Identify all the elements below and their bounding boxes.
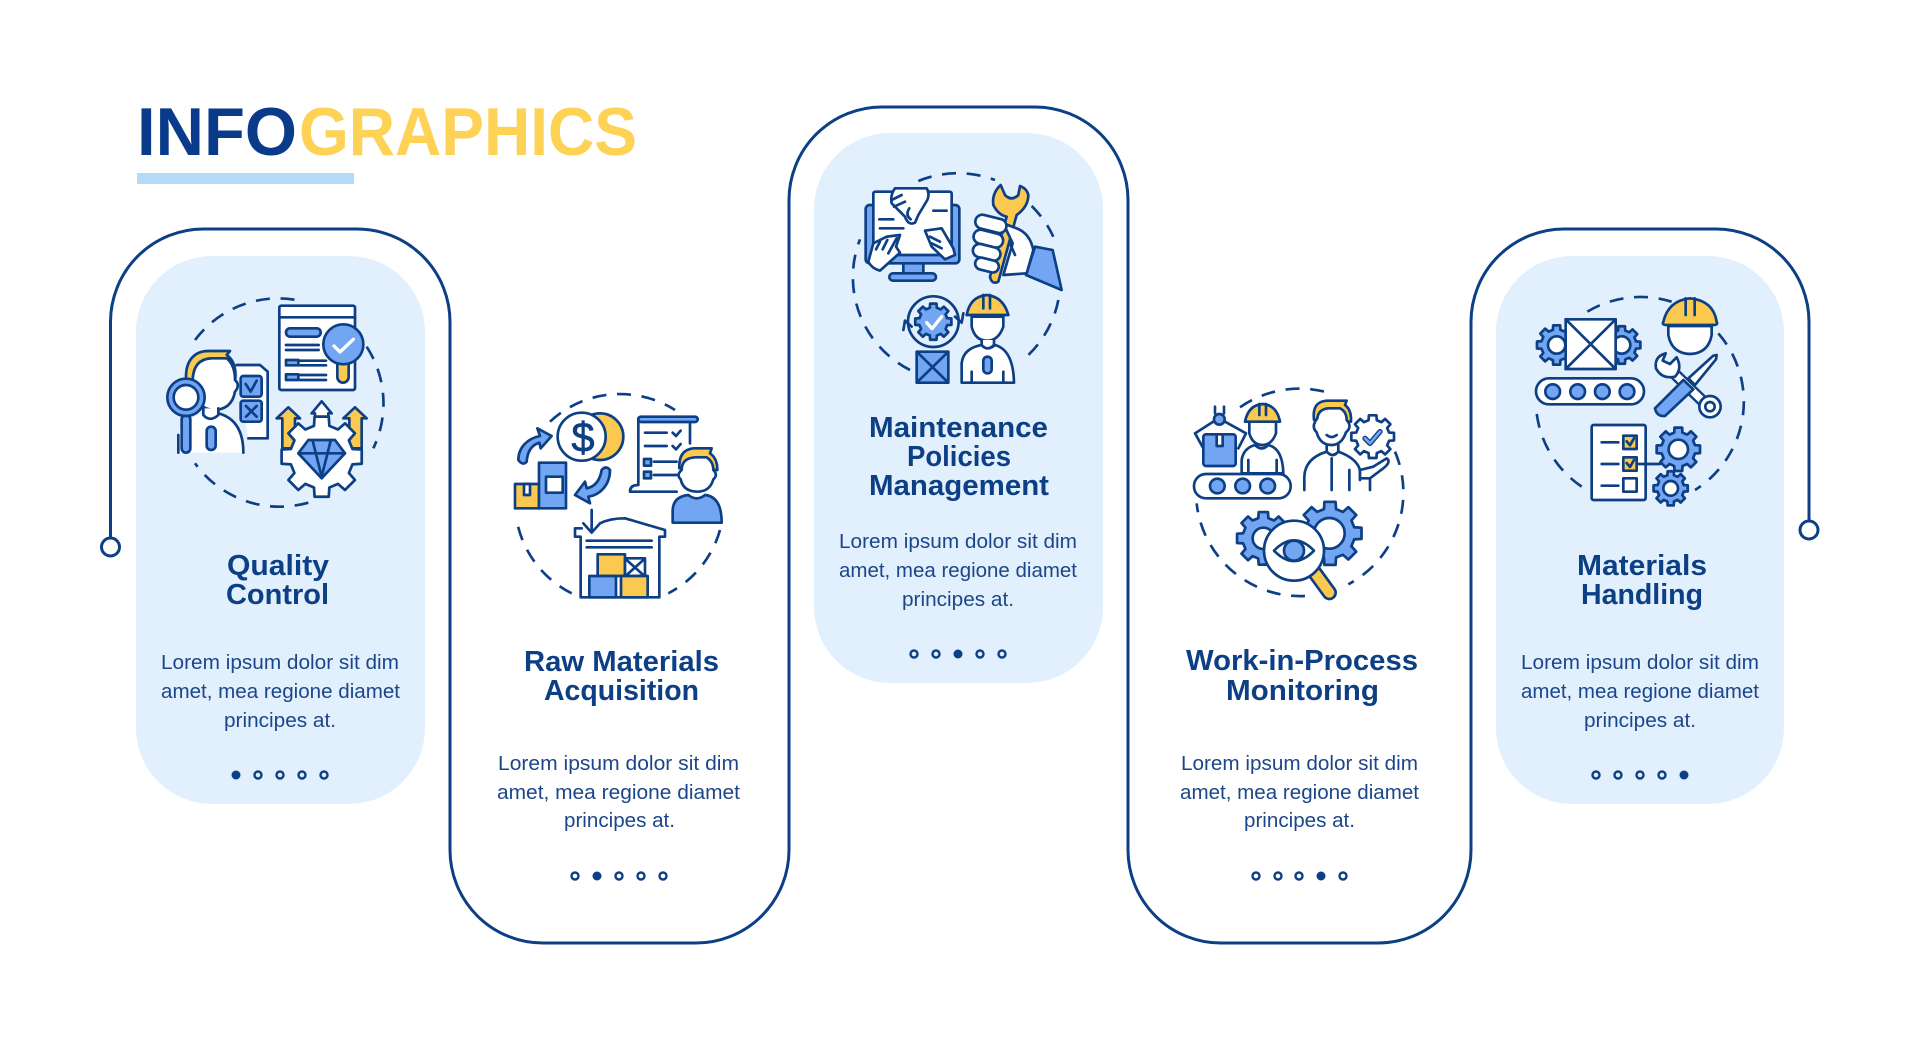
text: work-in-process body: amet, mea regione diamet <box>1180 781 1419 804</box>
heading: quality control: Control <box>226 579 329 611</box>
text: raw materials body: Lorem ipsum dolor sit dim <box>498 752 739 775</box>
heading: materials handling: Materials <box>1577 550 1707 582</box>
text: quality control body <box>161 651 400 732</box>
outline start node <box>102 538 120 556</box>
title: INFO <box>137 94 297 170</box>
heading: raw materials acquisition: Acquisition <box>544 675 699 707</box>
heading: work-in-process monitoring: Monitoring <box>1226 675 1379 707</box>
text: work-in-process body: principes at. <box>1244 809 1355 832</box>
text: materials handling body <box>1521 651 1759 732</box>
panel background: maintenance policies management <box>814 133 1103 683</box>
text: quality control body: amet, mea regione diamet <box>161 680 400 703</box>
panel background: quality control <box>136 256 425 804</box>
text: materials handling body: principes at. <box>1584 709 1696 732</box>
heading: maintenance policies management <box>869 412 1049 502</box>
pagination dots: step 3 <box>910 650 1006 658</box>
panel background: materials handling <box>1496 256 1784 804</box>
text: materials handling body: Lorem ipsum dolor sit dim <box>1521 651 1759 674</box>
text: maintenance body: amet, mea regione diamet <box>839 559 1077 582</box>
icon: materials handling <box>1536 297 1744 505</box>
heading: materials handling <box>1577 550 1707 611</box>
heading: maintenance policies management: Maintenance <box>869 412 1048 444</box>
icon: maintenance policies management <box>853 173 1062 383</box>
heading: raw materials acquisition: Raw Materials <box>524 646 719 678</box>
text: maintenance body: principes at. <box>902 588 1014 611</box>
icon: quality control <box>167 298 383 507</box>
text: quality control body: Lorem ipsum dolor sit dim <box>161 651 399 674</box>
title <box>137 94 637 170</box>
pagination dots: step 2 <box>572 872 666 880</box>
heading: quality control: Quality <box>227 550 329 582</box>
icon: raw materials acquisition <box>515 394 722 597</box>
icon: dollar sign: $ <box>571 413 595 460</box>
text: maintenance body: Lorem ipsum dolor sit dim <box>839 530 1077 553</box>
heading: materials handling: Handling <box>1581 579 1703 611</box>
outline end node <box>1800 521 1818 539</box>
continuous outline connecting all panels <box>110 107 1809 943</box>
text: raw materials body <box>497 752 740 832</box>
pagination dots: step 5 <box>1592 770 1688 780</box>
text: maintenance body <box>839 530 1077 611</box>
text: raw materials body: principes at. <box>564 809 675 832</box>
text: raw materials body: amet, mea regione diamet <box>497 781 740 804</box>
text: quality control body: principes at. <box>224 709 336 732</box>
heading: raw materials acquisition <box>524 646 719 707</box>
text: materials handling body: amet, mea regione diamet <box>1521 680 1759 703</box>
text: work-in-process body: Lorem ipsum dolor sit dim <box>1181 752 1418 775</box>
icon: work-in-process monitoring <box>1194 389 1403 596</box>
heading: quality control <box>226 550 329 611</box>
heading: maintenance policies management: Policies <box>907 441 1011 473</box>
pagination dots: step 1 <box>232 770 328 780</box>
heading: work-in-process monitoring <box>1186 645 1418 707</box>
heading: maintenance policies management: Management <box>869 470 1049 502</box>
pagination dots: step 4 <box>1252 872 1346 880</box>
title underline <box>137 173 354 184</box>
text: work-in-process body <box>1180 752 1419 832</box>
heading: work-in-process monitoring: Work-in-Process <box>1186 645 1418 677</box>
title: GRAPHICS <box>299 94 637 170</box>
